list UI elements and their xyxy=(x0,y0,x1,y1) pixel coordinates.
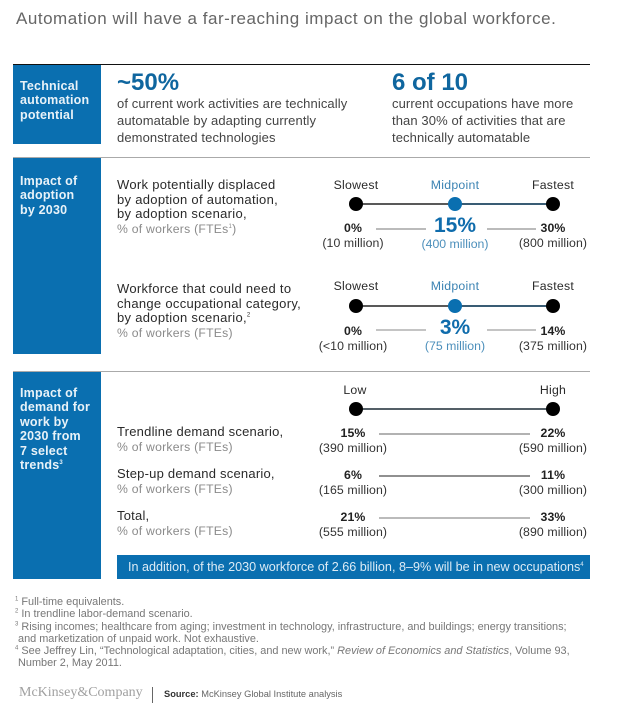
trendline low value: 15% xyxy=(341,426,365,440)
section rule xyxy=(13,64,590,65)
total low value: (555 million) xyxy=(319,525,387,539)
value midpoint: 3% xyxy=(440,316,470,339)
text: step-up scenario xyxy=(117,466,275,496)
midpoint label: Midpoint xyxy=(431,178,479,192)
text: workforce changing category: by adoption scenario,2 xyxy=(117,310,251,325)
value midpoint: (400 million) xyxy=(422,237,488,251)
value midpoint: 15% xyxy=(434,214,476,237)
value fastest: (800 million) xyxy=(519,236,587,250)
text: step-up scenario: % of workers (FTEs) xyxy=(117,482,233,496)
footnotes: and marketization of unpaid work. Not exhaustive. xyxy=(18,633,259,645)
panel: technical automation potential xyxy=(13,64,590,145)
panel: impact of demand for work xyxy=(13,371,590,579)
midpoint label: Midpoint xyxy=(431,279,479,293)
label: impact of adoption: by 2030 xyxy=(20,203,67,217)
label: impact of demand: work by xyxy=(20,415,69,429)
title: Automation will have a far-reaching impact on the global workforce. xyxy=(16,9,556,28)
scale labels: Slowest xyxy=(334,178,378,192)
label: impact of demand: Impact of xyxy=(20,386,77,400)
label: impact of demand xyxy=(13,372,101,579)
section rule xyxy=(13,157,590,158)
value slowest xyxy=(322,221,384,250)
value fastest: (375 million) xyxy=(519,339,587,353)
label: impact of demand: 7 select xyxy=(20,444,67,458)
text: total: Total, xyxy=(117,508,149,523)
section rule xyxy=(13,371,590,372)
high label: High xyxy=(540,383,566,397)
text: trendline scenario: Trendline demand scenario, xyxy=(117,424,283,439)
trendline high value: (590 million) xyxy=(519,441,587,455)
value fastest: 14% xyxy=(541,324,565,338)
footnotes xyxy=(15,596,570,669)
label: impact of adoption: adoption xyxy=(20,188,74,202)
value slowest: (10 million) xyxy=(322,236,384,250)
trendline high value: 22% xyxy=(541,426,565,440)
text: workforce changing category: % of workers (FTEs) xyxy=(117,326,233,340)
text: total xyxy=(117,508,233,538)
footnotes: 4 See Jeffrey Lin, “Technological adaptation, cities, and new work,” Review of Economics and Statistics, Volume 93, xyxy=(15,645,570,657)
low label: Low xyxy=(343,383,367,397)
text: trendline scenario xyxy=(117,424,283,454)
scale line with dots xyxy=(349,299,560,330)
callout: new occupations: In addition, of the 2030 workforce of 2.66 billion, 8–9% will be in new occupations4 xyxy=(128,560,584,574)
chart: demand low-high scale xyxy=(319,383,587,539)
step-up high value: (300 million) xyxy=(519,483,587,497)
text: work potentially displaced: by adoption of automation, xyxy=(117,192,278,206)
label: technical automation potential: automation xyxy=(20,93,89,107)
text: trendline scenario: % of workers (FTEs) xyxy=(117,440,233,454)
stat: about 50 percent xyxy=(117,69,348,145)
text: workforce changing category: Workforce that could need to xyxy=(117,281,291,296)
value fastest: 30% xyxy=(541,221,565,235)
stat: about 50 percent: of current work activities are technically xyxy=(117,96,347,111)
trendline high value xyxy=(519,426,587,455)
slowest label: Slowest xyxy=(334,279,378,293)
total low value: 21% xyxy=(341,510,365,524)
footnotes: 3 Rising incomes; healthcare from aging; investment in technology, infrastructure, and buildings; energy transitions; xyxy=(15,621,567,633)
value midpoint xyxy=(422,214,488,251)
callout: new occupations xyxy=(117,555,590,579)
total high value: 33% xyxy=(541,510,565,524)
label: impact of demand: demand for xyxy=(20,400,90,414)
step-up low value: 6% xyxy=(344,468,362,482)
text: workforce changing category xyxy=(117,281,301,340)
label: technical automation potential xyxy=(13,65,101,144)
stat: about 50 percent: ~50% xyxy=(117,69,179,96)
stat: 6 of 10: current occupations have more xyxy=(392,96,573,111)
stat: 6 of 10: than 30% of activities that are xyxy=(392,113,566,128)
value midpoint xyxy=(425,316,485,353)
divider xyxy=(152,687,153,703)
stat: about 50 percent: demonstrated technologies xyxy=(117,130,276,145)
logo: McKinsey & Company: McKinsey&Company xyxy=(19,685,143,700)
text: work potentially displaced xyxy=(117,177,278,236)
footnotes: 1 Full-time equivalents. xyxy=(15,596,124,608)
footnotes: 2 In trendline labor-demand scenario. xyxy=(15,608,193,620)
label: impact of adoption xyxy=(13,158,101,354)
step-up high value: 11% xyxy=(541,468,565,482)
panel: impact of adoption by 2030 xyxy=(13,157,590,354)
text: work potentially displaced: Work potentially displaced xyxy=(117,177,276,192)
label: impact of adoption: Impact of xyxy=(20,174,77,188)
text: work potentially displaced: by adoption scenario, xyxy=(117,206,247,221)
total high value: (890 million) xyxy=(519,525,587,539)
trendline low value xyxy=(319,426,387,455)
fastest label: Fastest xyxy=(532,178,574,192)
footnotes: Number 2, May 2011. xyxy=(18,657,122,669)
label: technical automation potential: Technical xyxy=(20,79,79,93)
scale line with dots xyxy=(349,197,560,230)
value slowest: (<10 million) xyxy=(319,339,387,353)
value midpoint: (75 million) xyxy=(425,339,485,353)
text: step-up scenario: Step-up demand scenario, xyxy=(117,466,275,481)
stat: 6 of 10 xyxy=(392,69,573,145)
step-up low value xyxy=(319,468,387,497)
chart: occupational change scenario scale xyxy=(319,279,587,353)
total low value xyxy=(319,510,387,539)
label: technical automation potential: potential xyxy=(20,108,74,122)
value slowest xyxy=(319,324,387,353)
trendline low value: (390 million) xyxy=(319,441,387,455)
text: workforce changing category: change occupational category, xyxy=(117,296,301,310)
total high value xyxy=(519,510,587,539)
value fastest xyxy=(519,324,587,353)
step-up low value: (165 million) xyxy=(319,483,387,497)
step-up high value xyxy=(519,468,587,497)
label: impact of demand: 2030 from xyxy=(20,429,81,443)
text: work potentially displaced: % of workers (FTEs1) xyxy=(117,222,236,236)
stat: about 50 percent: automatable by adapting currently xyxy=(117,113,316,128)
chart: displaced workers scenario scale xyxy=(322,178,587,251)
text: total: % of workers (FTEs) xyxy=(117,524,233,538)
value slowest: 0% xyxy=(344,324,362,338)
stat: 6 of 10: 6 of 10 xyxy=(392,69,468,96)
value fastest xyxy=(519,221,587,250)
scale lines xyxy=(349,402,560,518)
label: impact of demand: trends3 xyxy=(20,458,63,472)
value slowest: 0% xyxy=(344,221,362,235)
stat: 6 of 10: technically automatable xyxy=(392,130,530,145)
source: Source: McKinsey Global Institute analysis xyxy=(164,689,342,699)
fastest label: Fastest xyxy=(532,279,574,293)
